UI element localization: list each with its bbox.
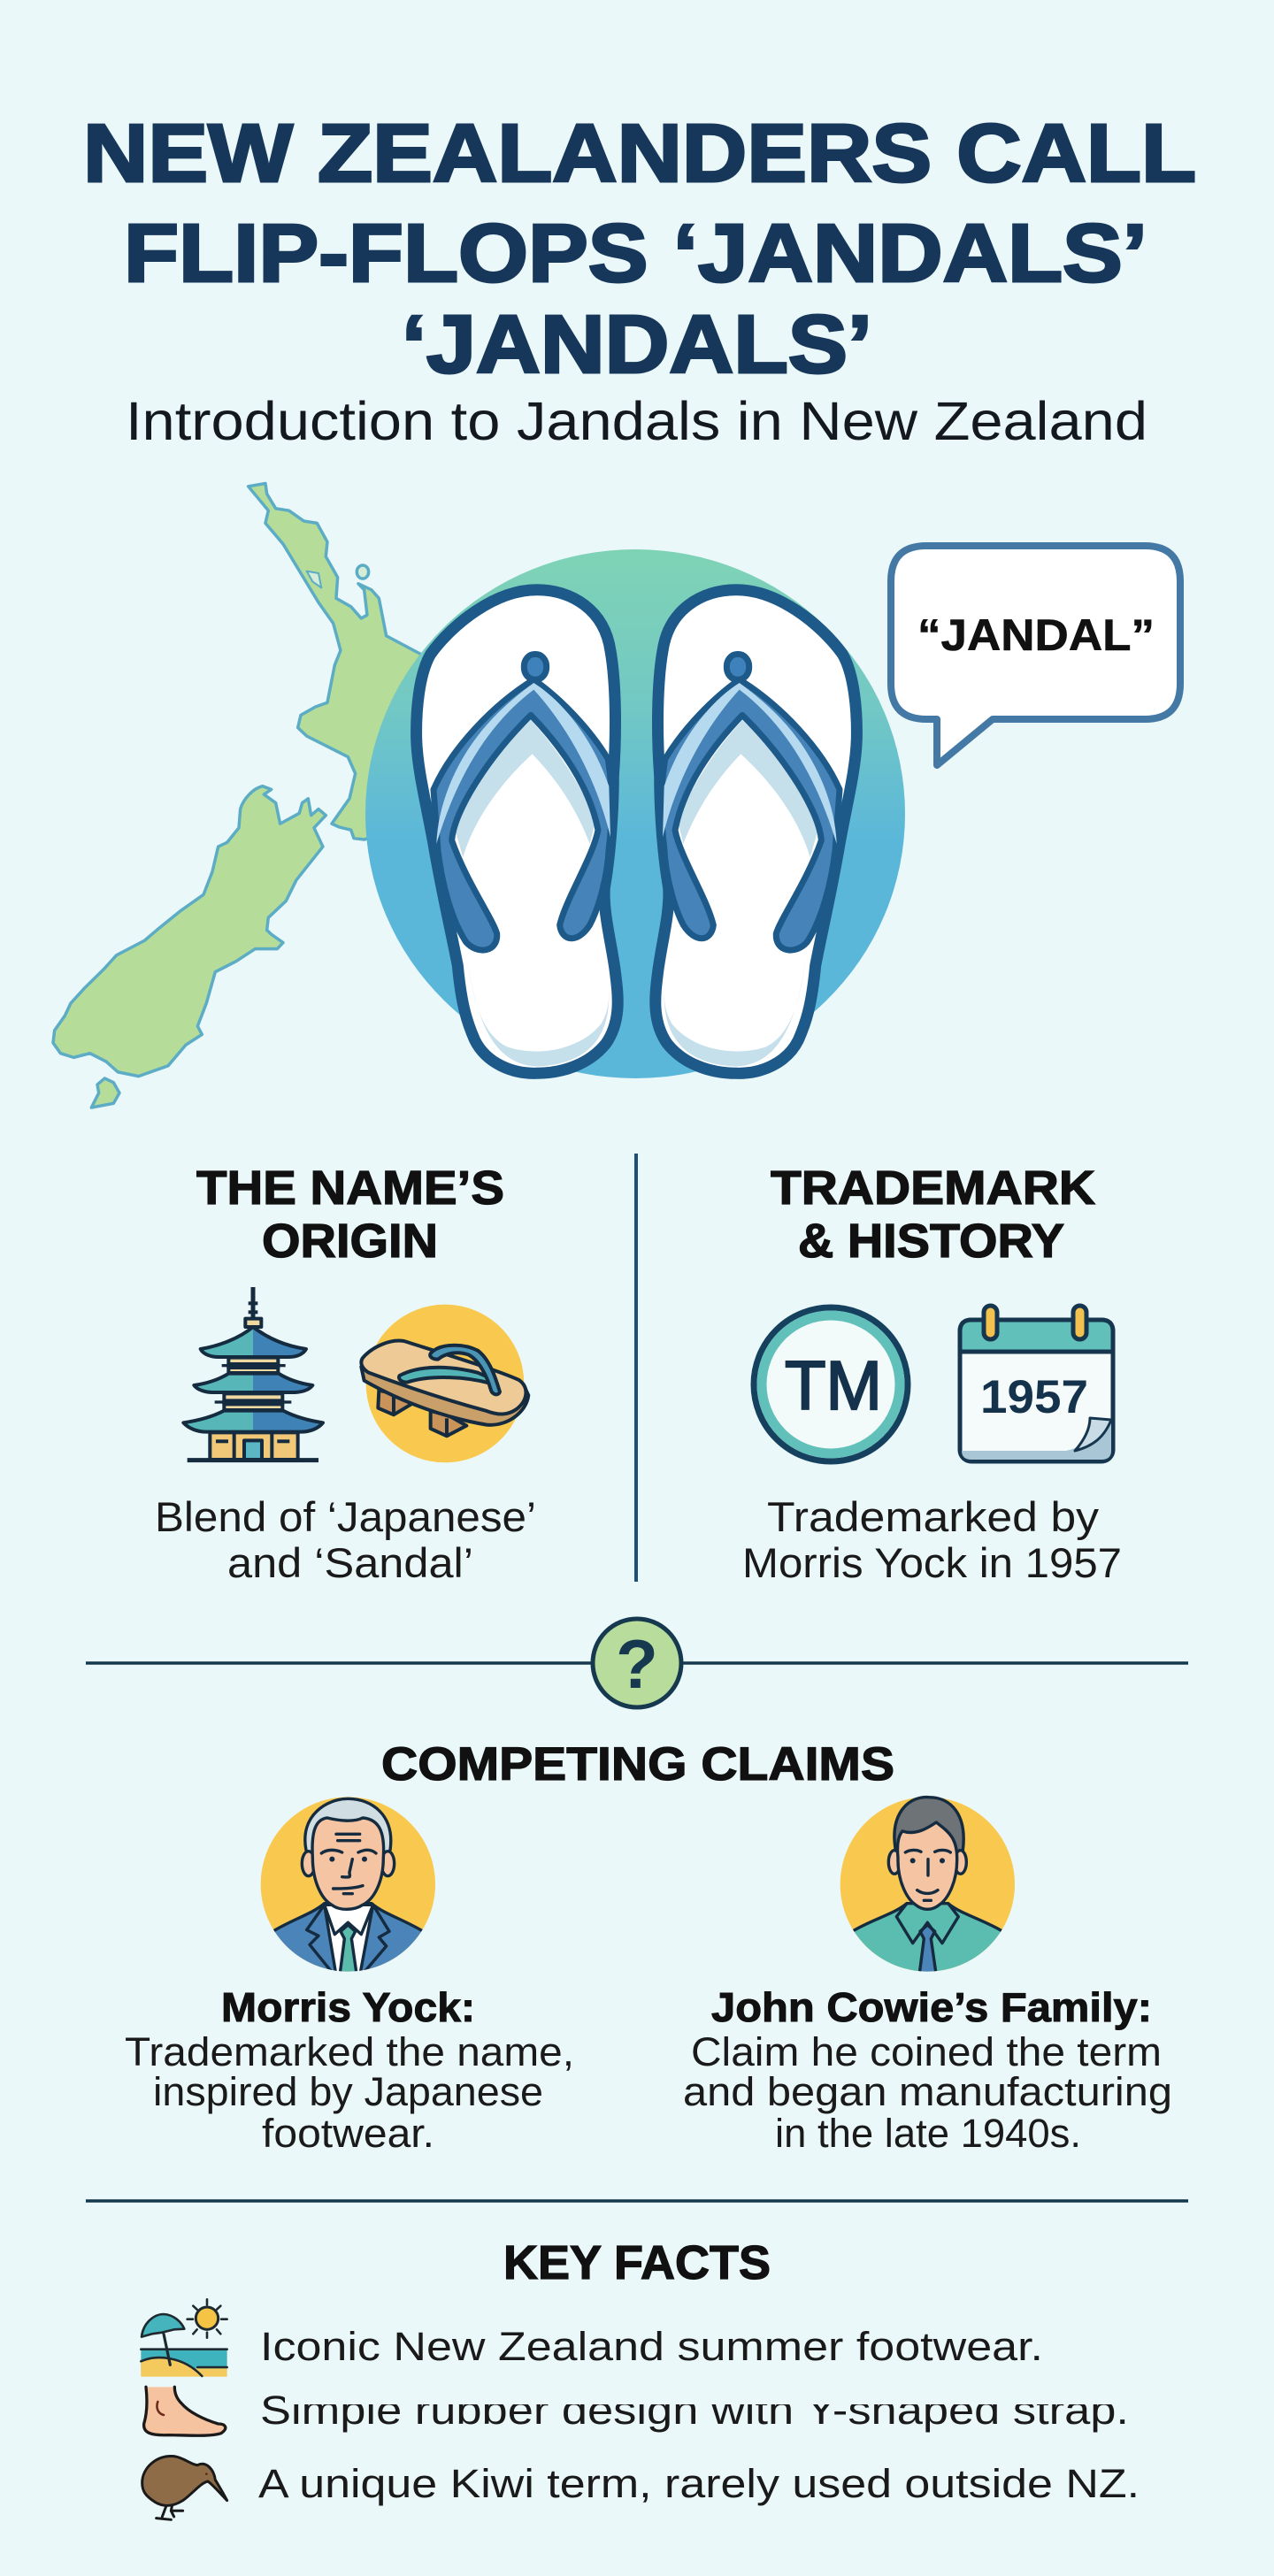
callout: speech bubble <box>891 546 1180 765</box>
icon: trademark badge: TM <box>785 1346 882 1424</box>
heading: trademark and history <box>771 1162 1095 1268</box>
icon: geta sandal on yellow circle <box>361 1305 528 1462</box>
title: FLIP-FLOPS ‘JANDALS’ <box>124 207 1147 299</box>
text: Morris Yock claim: Morris Yock: <box>221 1984 475 2030</box>
text: Morris Yock claim: inspired by Japanese <box>153 2069 543 2114</box>
icon: question mark <box>593 1619 681 1707</box>
icon: left jandal <box>417 590 618 1073</box>
subtitle: Introduction to Jandals in New Zealand <box>126 391 1147 451</box>
text: John Cowie claim: in the late 1940s. <box>775 2111 1081 2156</box>
panel: Morris Yock <box>125 1797 574 2156</box>
icon: right jandal <box>656 590 856 1073</box>
title: ‘JANDALS’ <box>402 298 872 390</box>
icon: kiwi <box>142 2457 227 2519</box>
title <box>83 107 1196 390</box>
text: John Cowie claim: and began manufacturing <box>683 2069 1172 2114</box>
divider between origin and trademark <box>634 1154 638 1582</box>
icon: pagoda <box>183 1287 323 1460</box>
map: New Zealand <box>53 484 431 1108</box>
portrait: Morris Yock <box>260 1797 435 1972</box>
text: John Cowie claim: Claim he coined the term <box>691 2029 1162 2074</box>
icon: calendar 1957 <box>960 1306 1113 1461</box>
gradient disc behind jandals <box>365 549 905 1078</box>
text: John Cowie claim: John Cowie’s Family: <box>711 1984 1152 2030</box>
portrait: John Cowie <box>840 1796 1015 1972</box>
icon: question mark: ? <box>616 1625 658 1703</box>
heading: trademark and history: TRADEMARK <box>771 1162 1095 1215</box>
heading: the name's origin: ORIGIN <box>262 1215 438 1268</box>
heading: the name's origin <box>196 1162 504 1268</box>
text: John Cowie claim <box>683 1984 1172 2156</box>
text: trademarked description <box>742 1493 1122 1586</box>
text: blend description <box>155 1493 536 1586</box>
icon: trademark badge <box>754 1307 908 1461</box>
panel: trademark and history <box>742 1162 1122 1586</box>
heading: key facts: KEY FACTS <box>503 2236 771 2289</box>
text: fact 1: Iconic New Zealand summer footwear. <box>260 2324 1043 2369</box>
divider with question badge <box>86 1619 1188 1707</box>
text: trademarked description: Morris Yock in 1957 <box>742 1539 1122 1586</box>
text: blend description: and ‘Sandal’ <box>227 1539 473 1586</box>
icon: calendar 1957: 1957 <box>980 1371 1088 1423</box>
heading: the name's origin: THE NAME’S <box>196 1162 504 1215</box>
panel: John Cowie's family <box>683 1797 1172 2156</box>
text: Morris Yock claim: Trademarked the name, <box>125 2029 574 2074</box>
panel: the name's origin <box>155 1162 536 1586</box>
text: fact 2 (partly erased): Simple rubber design with Y-shaped strap. <box>260 2388 1129 2433</box>
icon: beach <box>141 2299 227 2377</box>
heading: competing claims: COMPETING CLAIMS <box>381 1738 894 1790</box>
text: Morris Yock claim: footwear. <box>262 2111 434 2156</box>
text: fact 3: A unique Kiwi term, rarely used outside NZ. <box>258 2461 1140 2506</box>
title: NEW ZEALANDERS CALL <box>83 107 1196 199</box>
icon: foot <box>144 2387 226 2435</box>
text: trademarked description: Trademarked by <box>767 1493 1100 1540</box>
text: Morris Yock claim <box>125 1984 574 2156</box>
heading: trademark and history: & HISTORY <box>798 1215 1064 1268</box>
text: blend description: Blend of ‘Japanese’ <box>155 1493 536 1540</box>
callout: speech bubble: “JANDAL” <box>917 610 1155 660</box>
